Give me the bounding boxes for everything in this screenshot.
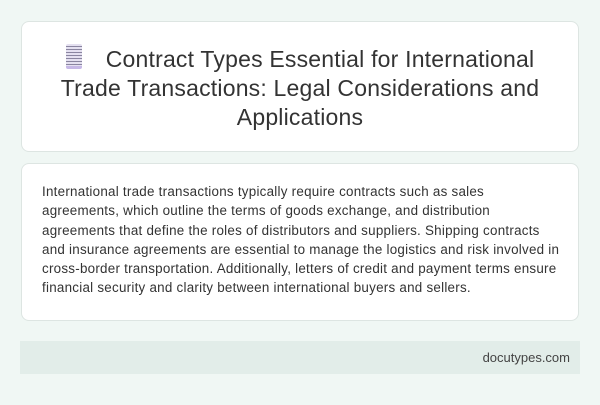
title: Contract Types Essential for International Trade Transactions: Legal Considerations and Applications xyxy=(61,46,539,130)
icon: document xyxy=(66,44,82,69)
footer source: docutypes.com xyxy=(483,350,570,365)
footer bar xyxy=(20,341,580,374)
description card xyxy=(21,163,579,321)
description text: International trade transactions typically require contracts such as sales agreements, which outline the terms of goods exchange, and distribution agreements that define the roles of distributors and suppliers. Shipping contracts and insurance agreements are essential to manage the logistics and risk involved in cross-border transportation. Additionally, letters of credit and payment terms ensure financial security and clarity between international buyers and sellers. xyxy=(42,184,559,295)
title card xyxy=(21,21,579,152)
